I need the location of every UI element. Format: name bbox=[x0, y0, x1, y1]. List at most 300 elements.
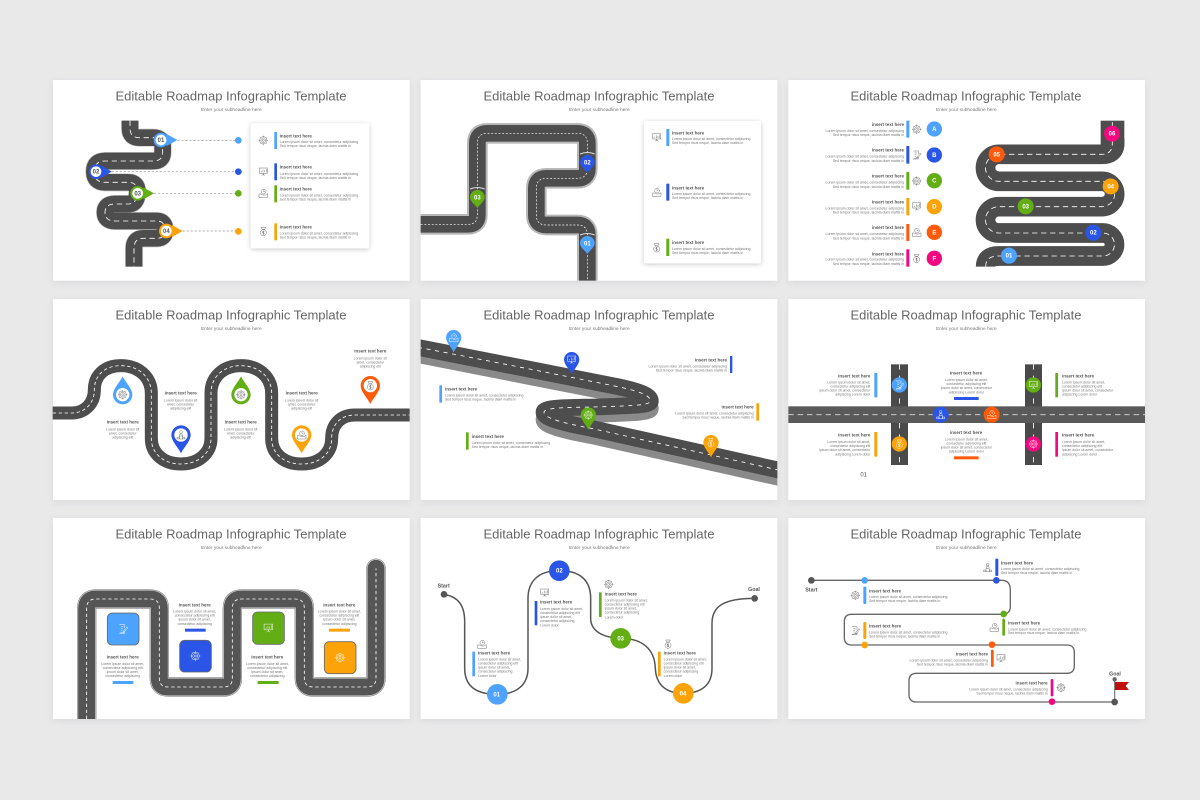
text block 04: insert text here bbox=[664, 651, 696, 656]
panel background bbox=[788, 299, 1145, 500]
card item 2: Lorem ipsum dolor sit amet, consectetur adipiscing bbox=[672, 192, 750, 196]
title: Editable Roadmap Infographic Template bbox=[115, 308, 346, 322]
start point bbox=[438, 583, 450, 598]
text block 5 bbox=[354, 349, 387, 369]
node 01: 01 bbox=[493, 692, 501, 698]
text block 1: consectetur adipiscing elit bbox=[103, 666, 143, 670]
text block green: Sed tempor risus neque, lacinia diam mattis in bbox=[472, 445, 543, 449]
title: Editable Roadmap Infographic Template bbox=[115, 89, 346, 103]
text block 01: insert text here bbox=[478, 651, 511, 656]
road bbox=[985, 121, 1124, 267]
node 03 bbox=[610, 628, 631, 649]
node 03: 03 bbox=[617, 636, 625, 642]
text block 01 bbox=[472, 640, 521, 678]
text block top centre: adipiscing Lorem dolor bbox=[949, 390, 985, 394]
item orange: insert text here bbox=[869, 624, 902, 629]
text block 04: consectetur adipiscing bbox=[664, 670, 698, 674]
tile light blue bbox=[107, 613, 139, 645]
subtitle: Enter your subheadline here bbox=[569, 545, 630, 550]
card item 2 bbox=[652, 184, 750, 201]
list item F: F bbox=[933, 256, 937, 262]
list item A: Sed tempor risus neque, lacinia diam mattis in bbox=[833, 133, 904, 137]
text block 02 bbox=[535, 589, 583, 627]
card item 4: Sed tempor risus neque, lacinia diam mattis in bbox=[280, 235, 351, 239]
text block top left bbox=[819, 373, 877, 397]
text block 2: insert text here bbox=[179, 603, 211, 608]
curve path bbox=[444, 571, 755, 694]
text block 3: insert text here bbox=[251, 655, 284, 660]
text block 4: ipsum dolor sit amet, bbox=[323, 618, 355, 622]
item orange bbox=[852, 622, 947, 648]
text block light blue bbox=[439, 385, 523, 403]
text block 2 bbox=[173, 603, 216, 632]
card item 3: Sed tempor risus neque, lacinia diam mattis in bbox=[672, 251, 743, 255]
text block 04: ipsum dolor sit amet, bbox=[664, 666, 696, 670]
text block blue bbox=[649, 356, 732, 373]
text block 02: consectetur adipiscing bbox=[540, 619, 575, 623]
text block top right: adipiscing Lorem dolor bbox=[1062, 393, 1098, 397]
panel background bbox=[53, 80, 410, 281]
title: Editable Roadmap Infographic Template bbox=[483, 527, 714, 541]
item pink: Sed tempor risus neque, lacinia diam mattis in bbox=[976, 692, 1048, 696]
pin 02: 02 bbox=[584, 160, 591, 166]
text block bottom left: consectetur adipiscing elit bbox=[830, 444, 870, 448]
list item E: E bbox=[932, 230, 936, 236]
text block orange: Lorem ipsum dolor sit amet, consectetur adipiscing bbox=[675, 412, 754, 416]
text block 04 bbox=[658, 640, 707, 678]
road bbox=[53, 366, 410, 464]
title: Editable Roadmap Infographic Template bbox=[850, 527, 1081, 541]
tile royal blue bbox=[180, 640, 211, 672]
text block 3 bbox=[224, 419, 257, 439]
pin 1 bbox=[446, 330, 461, 352]
list item A: Lorem ipsum dolor sit amet, consectetur adipiscing bbox=[826, 129, 904, 133]
title: Editable Roadmap Infographic Template bbox=[850, 308, 1081, 322]
panel: right-angle road with square tiles bbox=[53, 518, 410, 719]
list item F: insert text here bbox=[872, 251, 904, 256]
flag 04 bbox=[159, 224, 183, 238]
pin 03 bbox=[470, 187, 485, 208]
road bbox=[94, 121, 165, 267]
panel background bbox=[421, 80, 777, 281]
goal point bbox=[748, 587, 760, 602]
card item 3 bbox=[259, 185, 358, 202]
milestone 06 bbox=[1104, 126, 1120, 142]
marker 5 bbox=[361, 376, 380, 404]
drop marker 3 bbox=[231, 376, 251, 404]
text block 01: Lorem dolor bbox=[478, 674, 497, 678]
flag 01: 01 bbox=[158, 138, 165, 144]
card item 4: Lorem ipsum dolor sit amet, consectetur adipiscing bbox=[280, 231, 358, 235]
goal flag: Goal bbox=[1109, 672, 1121, 678]
text block 1: Lorem ipsum dolor sit bbox=[106, 427, 139, 431]
text block bottom left: Lorem ipsum dolor sit amet, bbox=[827, 440, 870, 444]
card item 2 bbox=[259, 163, 358, 180]
roads bbox=[788, 364, 1145, 465]
list item D: D bbox=[932, 205, 937, 211]
panel: winding road with map markers bbox=[53, 299, 410, 500]
list item D: Lorem ipsum dolor sit amet, consectetur adipiscing bbox=[826, 206, 904, 210]
text block bottom centre bbox=[941, 430, 993, 459]
text block 03: insert text here bbox=[605, 591, 637, 596]
list item C: Lorem ipsum dolor sit amet, consectetur adipiscing bbox=[826, 181, 904, 185]
text block 3: Lorem ipsum dolor sit bbox=[224, 427, 257, 431]
panel: perspective road with pins bbox=[418, 299, 781, 500]
text block 3: Lorem ipsum dolor sit amet, bbox=[246, 662, 289, 666]
card item 3: insert text here bbox=[672, 240, 705, 245]
item light blue bbox=[851, 577, 947, 604]
card bbox=[251, 123, 369, 248]
text block blue: insert text here bbox=[695, 358, 727, 363]
list item B: insert text here bbox=[872, 148, 904, 153]
text block 1: adipiscing elit bbox=[112, 435, 133, 439]
list item A: A bbox=[932, 127, 937, 133]
text block 1 bbox=[101, 655, 144, 684]
panel background bbox=[53, 518, 410, 719]
text block bottom centre: insert text here bbox=[950, 430, 983, 435]
flag 02: 02 bbox=[93, 170, 100, 176]
text block 02: Lorem dolor bbox=[540, 623, 559, 627]
drop marker 1 bbox=[113, 376, 132, 404]
text block top centre: consectetur adipiscing elit bbox=[946, 382, 986, 386]
text block 4: insert text here bbox=[323, 603, 356, 608]
text block 3: amet, consectetur bbox=[227, 431, 255, 435]
panel background bbox=[421, 299, 777, 500]
item orange: Lorem ipsum dolor sit amet, consectetur adipiscing bbox=[869, 630, 947, 634]
card bbox=[644, 121, 761, 263]
text block 02: consectetur adipiscing elit bbox=[540, 611, 580, 615]
card item 2: Sed tempor risus neque, lacinia diam mattis in bbox=[280, 176, 351, 180]
list item D: insert text here bbox=[872, 199, 904, 204]
panel: crossroads bbox=[788, 299, 1145, 500]
text block orange bbox=[675, 403, 759, 421]
item royal blue: insert text here bbox=[1001, 560, 1034, 565]
card item 1: Sed tempor risus neque, lacinia diam mattis in bbox=[280, 144, 351, 148]
node: orange bbox=[892, 436, 907, 452]
item royal blue: Sed tempor risus neque, lacinia diam mattis in bbox=[1001, 571, 1072, 575]
text block top left: Lorem ipsum dolor sit amet, bbox=[827, 381, 870, 385]
card item 3: insert text here bbox=[280, 186, 312, 191]
title: Editable Roadmap Infographic Template bbox=[483, 308, 714, 322]
text block bottom centre: consectetur adipiscing elit bbox=[946, 441, 986, 445]
text block top centre: Lorem ipsum dolor sit amet, bbox=[945, 378, 988, 382]
node 02 bbox=[549, 560, 570, 581]
list item D: Sed tempor risus neque, lacinia diam mattis in bbox=[833, 211, 904, 215]
milestone 01 bbox=[1001, 248, 1017, 264]
text block 1 bbox=[106, 419, 139, 439]
text block 04: Lorem dolor bbox=[664, 674, 683, 678]
text block 2: amet, consectetur bbox=[167, 403, 195, 407]
pin 01 bbox=[580, 233, 595, 254]
text block 03: ipsum dolor sit amet, bbox=[605, 607, 637, 611]
text block blue: Sed tempor risus neque, lacinia diam mattis in bbox=[656, 368, 727, 372]
card item 3: Lorem ipsum dolor sit amet, consectetur adipiscing bbox=[280, 193, 358, 197]
list item C: insert text here bbox=[872, 174, 904, 179]
item green: Sed tempor risus neque, lacinia diam mattis in bbox=[1008, 631, 1079, 635]
text block top centre: insert text here bbox=[950, 370, 983, 375]
panel: start to goal curve with four nodes bbox=[421, 518, 777, 719]
title: Editable Roadmap Infographic Template bbox=[483, 89, 714, 103]
card item 1: Lorem ipsum dolor sit amet, consectetur adipiscing bbox=[672, 137, 750, 141]
milestone 02: 02 bbox=[1090, 231, 1097, 237]
node: green bbox=[1026, 377, 1041, 393]
text block top right: consectetur adipiscing elit bbox=[1062, 385, 1102, 389]
text block 3: adipiscing elit bbox=[230, 435, 251, 439]
text block top right: ipsum dolor sit amet, consectetur bbox=[1062, 389, 1114, 393]
list item E: Sed tempor risus neque, lacinia diam mattis in bbox=[833, 236, 904, 240]
text block 01: ipsum dolor sit amet, bbox=[478, 666, 510, 670]
text block bottom centre: adipiscing Lorem dolor bbox=[949, 449, 985, 453]
text block blue: Lorem ipsum dolor sit amet, consectetur adipiscing bbox=[649, 364, 727, 368]
node 04: 04 bbox=[680, 691, 687, 697]
pin 01: 01 bbox=[584, 241, 591, 247]
text block top left: consectetur adipiscing elit bbox=[830, 385, 870, 389]
item red orange: Lorem ipsum dolor sit amet, consectetur adipiscing bbox=[910, 658, 988, 662]
text block bottom left bbox=[819, 432, 877, 457]
text block top right: Lorem ipsum dolor sit amet, bbox=[1062, 381, 1105, 385]
text block 03: consectetur adipiscing bbox=[605, 611, 639, 615]
panel: snaking road with numbered flags and card bbox=[53, 80, 410, 281]
text block 03: consectetur adipiscing elit bbox=[605, 603, 645, 607]
text block 2: ipsum dolor sit amet, bbox=[179, 618, 211, 622]
text block 04: consectetur adipiscing elit bbox=[664, 662, 704, 666]
subtitle: Enter your subheadline here bbox=[936, 326, 997, 331]
text block 04: Lorem ipsum dolor sit amet, bbox=[664, 658, 707, 662]
pin 02 bbox=[580, 152, 595, 173]
list item E: Lorem ipsum dolor sit amet, consectetur adipiscing bbox=[826, 232, 904, 236]
text block 4 bbox=[285, 391, 318, 411]
text block 03: Lorem dolor bbox=[605, 615, 624, 619]
dashed connectors bbox=[112, 137, 242, 235]
text block green bbox=[466, 432, 550, 450]
item light blue: Lorem ipsum dolor sit amet, consectetur adipiscing bbox=[869, 595, 947, 599]
milestone 05: 05 bbox=[993, 152, 1001, 158]
text block 5: insert text here bbox=[354, 349, 387, 354]
stray label 01: 01 bbox=[860, 473, 868, 479]
card item 1: insert text here bbox=[672, 130, 705, 135]
flag 03 bbox=[130, 186, 154, 201]
text block 01: consectetur adipiscing bbox=[478, 670, 513, 674]
text block 1: ipsum dolor sit amet, bbox=[107, 670, 139, 674]
list item C: C bbox=[932, 179, 937, 185]
text block light blue: Lorem ipsum dolor sit amet, consectetur adipiscing bbox=[445, 394, 523, 398]
node: red orange bbox=[984, 407, 1000, 423]
pin 3 bbox=[581, 407, 596, 430]
text block 3: ipsum dolor sit amet, bbox=[251, 670, 283, 674]
text block 01: Lorem ipsum dolor sit amet, bbox=[478, 658, 521, 662]
item pink bbox=[969, 679, 1066, 705]
subtitle: Enter your subheadline here bbox=[201, 326, 262, 331]
subtitle: Enter your subheadline here bbox=[201, 545, 262, 550]
text block bottom right: Lorem ipsum dolor sit amet, bbox=[1062, 440, 1105, 444]
marker 4 bbox=[292, 425, 311, 453]
text block 4: Lorem ipsum dolor sit bbox=[285, 399, 318, 403]
subtitle: Enter your subheadline here bbox=[936, 545, 997, 550]
list item C bbox=[826, 172, 942, 190]
card item 3: Lorem ipsum dolor sit amet, consectetur adipiscing bbox=[672, 247, 750, 251]
start point: Start bbox=[805, 588, 818, 594]
item red orange bbox=[910, 641, 1005, 667]
item royal blue: Lorem ipsum dolor sit amet, consectetur adipiscing bbox=[1001, 567, 1079, 571]
subtitle: Enter your subheadline here bbox=[569, 326, 630, 331]
subtitle: Enter your subheadline here bbox=[936, 107, 997, 112]
panel background bbox=[53, 299, 410, 500]
timeline path bbox=[811, 580, 1115, 702]
card item 2: insert text here bbox=[280, 165, 312, 170]
text block 2: consectetur adipiscing elit bbox=[175, 614, 215, 618]
text block bottom right: insert text here bbox=[1062, 433, 1095, 438]
milestone 04: 04 bbox=[1107, 184, 1115, 190]
list item C: Sed tempor risus neque, lacinia diam mattis in bbox=[833, 185, 904, 189]
text block 4: adipiscing elit bbox=[291, 407, 312, 411]
text block orange: Sed tempor risus neque, lacinia diam mattis in bbox=[682, 416, 754, 420]
panel: stepped timeline with flag bbox=[788, 518, 1145, 719]
text block 03: Lorem ipsum dolor sit amet, bbox=[605, 599, 648, 603]
pin 4 bbox=[703, 435, 719, 457]
item light blue: insert text here bbox=[869, 588, 902, 593]
text block 3 bbox=[246, 655, 289, 684]
text block green: insert text here bbox=[472, 434, 504, 439]
card item 4 bbox=[260, 223, 358, 240]
list item E bbox=[826, 224, 942, 241]
list item A: insert text here bbox=[872, 122, 904, 127]
list item F bbox=[826, 249, 942, 267]
flag 01 bbox=[154, 133, 177, 147]
goal point: Goal bbox=[748, 587, 760, 593]
panel background bbox=[421, 518, 777, 719]
item red orange: Sed tempor risus neque, lacinia diam mattis in bbox=[917, 662, 988, 666]
text block top left: insert text here bbox=[838, 374, 871, 379]
text block 1: insert text here bbox=[107, 655, 139, 660]
text block 4: consectetur adipiscing elit bbox=[319, 614, 359, 618]
list item B: Lorem ipsum dolor sit amet, consectetur adipiscing bbox=[826, 155, 904, 159]
item light blue: Sed tempor risus neque, lacinia diam mattis in bbox=[869, 599, 940, 603]
road surface bbox=[418, 347, 781, 471]
milestone 05 bbox=[989, 146, 1005, 162]
card item 4: insert text here bbox=[280, 224, 312, 229]
text block bottom left: adipiscing Lorem dolor bbox=[835, 452, 871, 456]
text block 03 bbox=[599, 580, 648, 619]
card item 1 bbox=[259, 132, 358, 149]
subtitle: Enter your subheadline here bbox=[201, 107, 262, 112]
text block 3: insert text here bbox=[225, 419, 257, 424]
milestone 03 bbox=[1018, 198, 1034, 214]
text block light blue: Sed tempor risus neque, lacinia diam mattis in bbox=[445, 398, 516, 402]
text block 1: insert text here bbox=[107, 419, 139, 424]
card item 1 bbox=[653, 129, 750, 146]
panel background bbox=[788, 518, 1145, 719]
text block top centre bbox=[941, 370, 993, 400]
text block top left: ipsum dolor sit amet, consectetur bbox=[819, 389, 871, 393]
text block 4: consectetur adipiscing bbox=[322, 622, 357, 626]
text block 4: amet, consectetur bbox=[288, 403, 316, 407]
text block top right: insert text here bbox=[1062, 374, 1095, 379]
start point: Start bbox=[438, 583, 450, 589]
card item 3 bbox=[654, 239, 750, 256]
list item B: Sed tempor risus neque, lacinia diam mattis in bbox=[833, 159, 904, 163]
pin 03: 03 bbox=[474, 195, 481, 201]
centre line bbox=[418, 347, 781, 471]
text block top right bbox=[1055, 373, 1114, 397]
text block 02: insert text here bbox=[540, 599, 573, 604]
item royal blue bbox=[984, 559, 1079, 584]
pin 2 bbox=[564, 352, 579, 374]
item pink: insert text here bbox=[1016, 681, 1048, 686]
card item 1: insert text here bbox=[280, 133, 312, 138]
node: light blue bbox=[892, 377, 907, 393]
panel: square road with pins and card bbox=[421, 80, 777, 281]
node 01 bbox=[487, 684, 508, 705]
list item F: Lorem ipsum dolor sit amet, consectetur adipiscing bbox=[826, 258, 904, 262]
text block bottom right: consectetur adipiscing elit bbox=[1062, 444, 1102, 448]
flag 03: 03 bbox=[134, 191, 142, 197]
card item 1: Sed tempor risus neque, lacinia diam mattis in bbox=[672, 141, 743, 145]
marker 2 bbox=[171, 425, 191, 453]
text block 02: ipsum dolor sit amet, bbox=[540, 615, 572, 619]
list item D bbox=[826, 198, 942, 215]
list item A bbox=[826, 121, 942, 138]
list item B bbox=[826, 146, 942, 164]
text block top left: adipiscing Lorem dolor bbox=[835, 393, 871, 397]
list item E: insert text here bbox=[872, 225, 904, 230]
item pink: Lorem ipsum dolor sit amet, consectetur adipiscing bbox=[969, 688, 1048, 692]
node: pink bbox=[1026, 436, 1041, 452]
text block 1: consectetur adipiscing bbox=[105, 674, 140, 678]
card item 1: Lorem ipsum dolor sit amet, consectetur adipiscing bbox=[280, 140, 358, 144]
flag 04: 04 bbox=[163, 229, 170, 235]
item green: insert text here bbox=[1008, 621, 1041, 626]
text block 2: Lorem ipsum dolor sit bbox=[164, 399, 197, 403]
text block 4 bbox=[318, 603, 361, 632]
text block 2: Lorem ipsum dolor sit amet, bbox=[173, 610, 216, 614]
text block light blue: insert text here bbox=[445, 387, 478, 392]
text block 3: consectetur adipiscing bbox=[250, 674, 285, 678]
text block 2 bbox=[164, 391, 197, 411]
item green: Lorem ipsum dolor sit amet, consectetur adipiscing bbox=[1008, 627, 1086, 631]
card item 2: Lorem ipsum dolor sit amet, consectetur adipiscing bbox=[280, 172, 358, 176]
node 02: 02 bbox=[556, 569, 563, 575]
text block 2: adipiscing elit bbox=[170, 407, 191, 411]
text block bottom right: ipsum dolor sit amet, consectetur bbox=[1062, 448, 1114, 452]
text block 4: insert text here bbox=[286, 391, 318, 396]
card item 2: Sed tempor risus neque, lacinia diam mattis in bbox=[672, 196, 743, 200]
text block 01: consectetur adipiscing elit bbox=[478, 662, 518, 666]
item green bbox=[990, 611, 1086, 636]
card item 3: Sed tempor risus neque, lacinia diam mattis in bbox=[280, 197, 351, 201]
milestone 03: 03 bbox=[1022, 204, 1030, 210]
milestone 06: 06 bbox=[1109, 132, 1116, 138]
road bbox=[420, 339, 778, 486]
panel: serpentine road with six milestones and A-F list bbox=[788, 80, 1145, 281]
text block bottom centre: ipsum dolor sit amet, consectetur bbox=[941, 445, 993, 449]
start point bbox=[805, 577, 818, 594]
node 04 bbox=[673, 683, 694, 704]
panel background bbox=[788, 80, 1145, 281]
subtitle: Enter your subheadline here bbox=[569, 107, 630, 112]
tile green bbox=[253, 612, 284, 644]
tile orange bbox=[324, 642, 356, 674]
milestone 02 bbox=[1085, 225, 1101, 241]
text block 4: Lorem ipsum dolor sit amet, bbox=[318, 610, 361, 614]
title: Editable Roadmap Infographic Template bbox=[850, 89, 1081, 103]
text block bottom right: adipiscing Lorem dolor bbox=[1062, 452, 1098, 456]
text block bottom centre: Lorem ipsum dolor sit amet, bbox=[945, 437, 988, 441]
road bbox=[421, 133, 587, 281]
text block 2: consectetur adipiscing bbox=[177, 622, 212, 626]
text block 5: adipiscing elit bbox=[360, 365, 381, 369]
flag 02 bbox=[89, 164, 112, 179]
text block 5: amet, consectetur bbox=[356, 361, 385, 365]
